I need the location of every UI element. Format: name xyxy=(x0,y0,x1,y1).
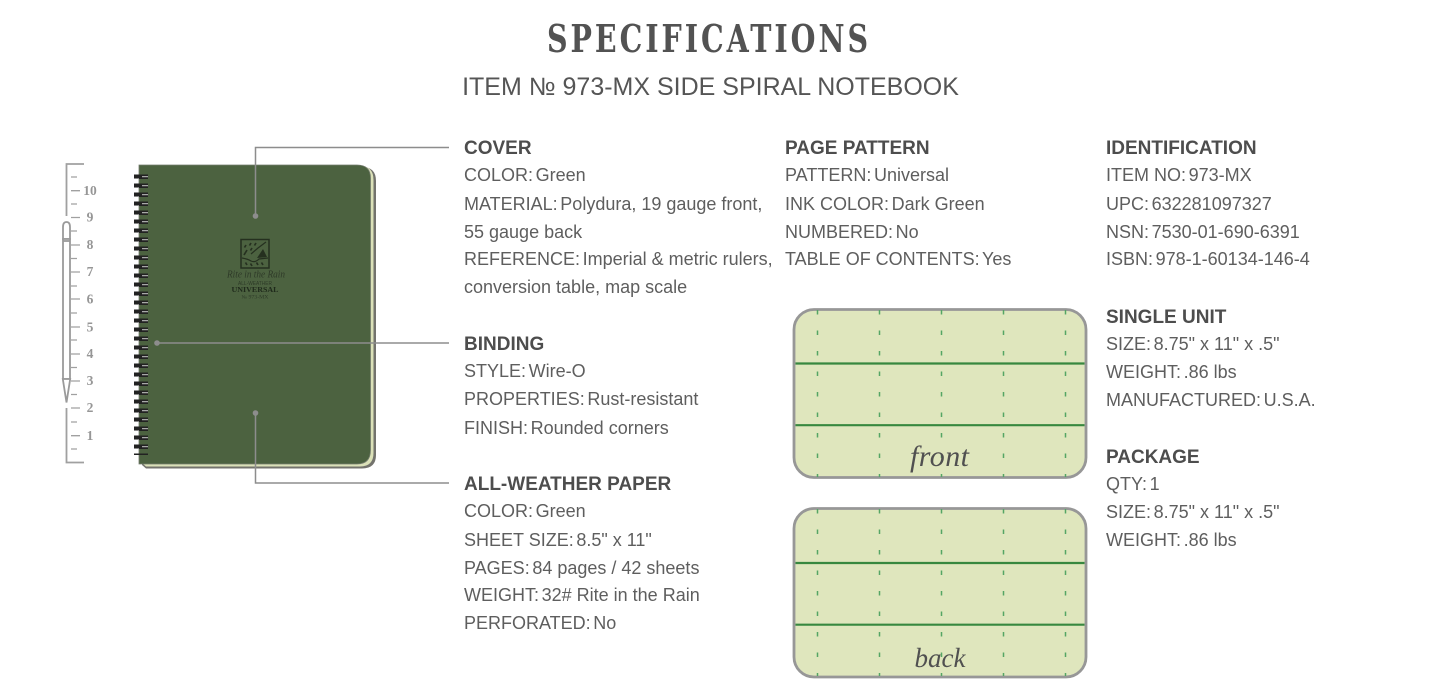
pencil xyxy=(63,222,70,402)
ruler: 5 xyxy=(87,320,94,334)
cover logo: UNIVERSAL xyxy=(232,286,279,294)
panel: single unit xyxy=(1106,307,1316,410)
panel: all-weather paper: PERFORATED: No xyxy=(464,613,616,633)
ruler: 1 xyxy=(87,428,94,443)
panel: all-weather paper: PAGES: 84 pages / 42 sheets xyxy=(464,558,699,578)
ruler: 7 xyxy=(87,264,94,279)
panel: binding: FINISH: Rounded corners xyxy=(464,418,669,438)
panel: binding: BINDING xyxy=(464,334,544,355)
subtitle: ITEM № 973-MX SIDE SPIRAL NOTEBOOK xyxy=(462,73,959,101)
panel: all-weather paper: ALL-WEATHER PAPER xyxy=(464,474,671,495)
paper edge xyxy=(142,166,374,466)
ruler xyxy=(66,164,97,462)
ruler: 8 xyxy=(87,237,94,252)
back cover edge xyxy=(142,167,376,468)
panel: identification: IDENTIFICATION xyxy=(1106,138,1257,159)
panel: cover: 55 gauge back xyxy=(464,222,582,242)
panel: cover: COVER xyxy=(464,138,532,159)
panel: all-weather paper: WEIGHT: 32# Rite in the Rain xyxy=(464,585,700,605)
ruler: 2 xyxy=(87,400,94,415)
panel: binding: STYLE: Wire-O xyxy=(464,361,586,381)
panel: binding: PROPERTIES: Rust-resistant xyxy=(464,389,698,409)
panel: cover: MATERIAL: Polydura, 19 gauge front, xyxy=(464,194,762,214)
panel: cover xyxy=(464,138,773,297)
cover logo: ALL-WEATHER xyxy=(238,281,272,287)
green cover xyxy=(139,165,370,464)
panel: page pattern: TABLE OF CONTENTS: Yes xyxy=(785,249,1011,269)
notebook xyxy=(136,165,376,468)
panel: identification: NSN: 7530-01-690-6391 xyxy=(1106,222,1300,242)
panel: cover: conversion table, map scale xyxy=(464,277,687,297)
panel: page pattern: INK COLOR: Dark Green xyxy=(785,194,985,214)
page pattern: front: front xyxy=(910,440,970,473)
ruler: 10 xyxy=(83,183,97,198)
ruler: 3 xyxy=(87,373,94,388)
panel: all-weather paper xyxy=(464,474,700,633)
panel: page pattern xyxy=(785,138,1011,269)
panel: page pattern: NUMBERED: No xyxy=(785,222,919,242)
panel: package: WEIGHT: .86 lbs xyxy=(1106,530,1237,550)
panel: package: SIZE: 8.75" x 11" x .5" xyxy=(1106,502,1280,522)
panel: identification xyxy=(1106,138,1310,269)
callout: cover xyxy=(253,148,449,219)
cover logo: Rite in the Rain xyxy=(226,268,285,280)
ruler: 9 xyxy=(87,210,94,224)
panel: page pattern: PATTERN: Universal xyxy=(785,165,949,185)
panel: identification: ITEM NO: 973-MX xyxy=(1106,165,1252,185)
ruler: 4 xyxy=(87,346,94,361)
page pattern: back xyxy=(794,508,1086,677)
wire-o spiral binding xyxy=(136,174,145,455)
ruler: 6 xyxy=(87,292,94,306)
cover logo: № 973-MX xyxy=(242,294,269,300)
panel: single unit: WEIGHT: .86 lbs xyxy=(1106,362,1237,382)
panel: identification: UPC: 632281097327 xyxy=(1106,194,1272,214)
panel: package xyxy=(1106,447,1280,550)
panel: cover: COLOR: Green xyxy=(464,165,586,185)
panel: all-weather paper: COLOR: Green xyxy=(464,501,586,521)
panel: package: QTY: 1 xyxy=(1106,474,1160,494)
callout: binding xyxy=(154,340,449,346)
panel: single unit: SIZE: 8.75" x 11" x .5" xyxy=(1106,334,1280,354)
panel: all-weather paper: SHEET SIZE: 8.5" x 11" xyxy=(464,530,652,550)
page pattern: back: back xyxy=(915,643,966,673)
panel: single unit: SINGLE UNIT xyxy=(1106,307,1226,328)
cover logo xyxy=(226,240,285,300)
panel: identification: ISBN: 978-1-60134-146-4 xyxy=(1106,249,1310,269)
page pattern: front xyxy=(794,310,1086,478)
panel: page pattern: PAGE PATTERN xyxy=(785,138,930,159)
callout: paper xyxy=(253,410,449,483)
panel: package: PACKAGE xyxy=(1106,447,1200,468)
panel: cover: REFERENCE: Imperial & metric rulers, xyxy=(464,249,773,269)
panel: binding xyxy=(464,334,698,438)
panel: single unit: MANUFACTURED: U.S.A. xyxy=(1106,390,1316,410)
